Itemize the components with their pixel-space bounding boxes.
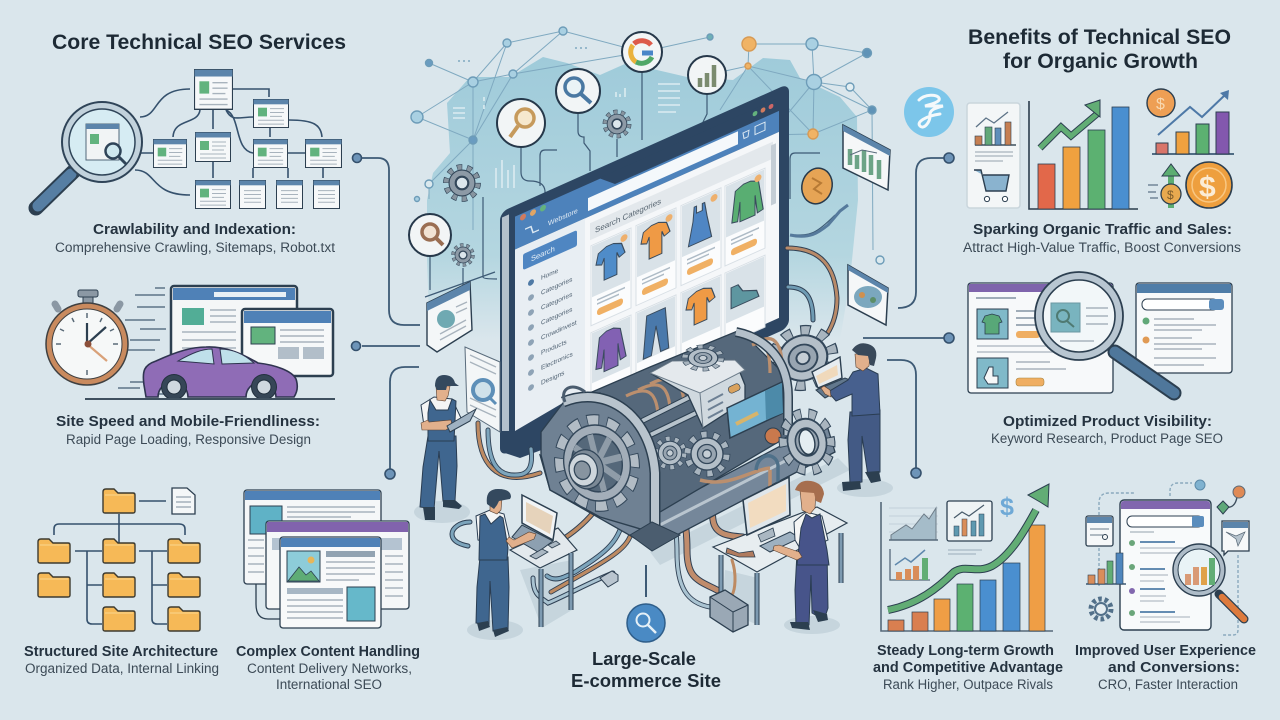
icon: search circle blue (556, 69, 600, 113)
front panel (541, 393, 655, 533)
text: improved user experience: and Conversions: (1108, 660, 1240, 676)
icon: gear (1091, 599, 1111, 619)
text: improved user experience (1075, 643, 1256, 692)
panel: complex content (236, 490, 420, 692)
chart: boxed mini (947, 501, 992, 541)
floor shadows (414, 458, 893, 640)
icon: small browser window (1086, 516, 1113, 546)
text: steady growth: and Competitive Advantage (873, 660, 1063, 676)
text: structured site architecture: Organized Data, Internal Linking (25, 661, 219, 676)
panel: product visibility (968, 272, 1232, 446)
machine interior (585, 330, 790, 515)
panel: long-term growth (873, 484, 1063, 692)
title: benefits: for Organic Growth (1003, 50, 1198, 73)
icon: search badge (627, 604, 665, 642)
text: complex content handling: International SEO (276, 677, 382, 692)
circuit lines to icons (425, 72, 835, 297)
interior pipes (626, 339, 782, 414)
title: benefits: Benefits of Technical SEO (968, 26, 1231, 49)
panel: organic traffic (963, 89, 1241, 255)
icon: layered content windows (244, 490, 409, 628)
text: crawlability and indexation: Crawlability and Indexation: (93, 222, 296, 238)
large monitor: Designs (541, 370, 565, 387)
icon: mini bars (1086, 553, 1126, 584)
icon: coin (798, 165, 836, 207)
machine base (540, 422, 835, 548)
large monitor: Crowdinvest (541, 319, 577, 342)
chart: line mini (890, 549, 930, 580)
large monitor: Categories (541, 306, 573, 327)
lower interior cables (700, 468, 770, 495)
icon: search results window (1136, 283, 1232, 373)
worker at left desk (476, 489, 577, 637)
left desk (510, 528, 577, 568)
icon: magnifying glass (36, 102, 142, 208)
text: complex content handling (236, 644, 420, 692)
icon: stopwatch (46, 290, 128, 385)
battery box (710, 590, 748, 632)
network of nodes (411, 27, 884, 264)
text: crawlability and indexation (55, 222, 335, 255)
title: core technical seo services: Core Technical SEO Services (52, 31, 346, 54)
cables (452, 248, 837, 607)
text: steady growth: Rank Higher, Outpace Rivals (883, 677, 1053, 692)
large monitor: Home (541, 267, 559, 282)
floating map window (848, 265, 888, 325)
panel: site architecture (24, 488, 219, 676)
text: improved user experience: Improved User Experience (1075, 643, 1256, 659)
dashed flow lines (1099, 483, 1238, 635)
label: large-scale e-commerce site: Large-Scale (592, 648, 696, 669)
text: optimized product visibility: Keyword Research, Product Page SEO (991, 431, 1223, 446)
plug on floor (600, 571, 618, 587)
large monitor: Categories (541, 276, 573, 297)
text: structured site architecture: Structured Site Architecture (24, 644, 218, 660)
icon: speed lines (118, 288, 166, 394)
chart: area mini (889, 508, 938, 540)
text: site speed and mobile-friendliness: Site Speed and Mobile-Friendliness: (56, 414, 320, 430)
bar chart: revenue with coin: $ (1156, 96, 1165, 113)
panel: user experience (1075, 480, 1256, 692)
icon: search circle orange (497, 99, 545, 147)
text: structured site architecture (24, 644, 219, 676)
icon: purple sports car (143, 347, 297, 400)
large monitor (500, 83, 789, 456)
icon: logo circle (904, 87, 954, 137)
background cloud shape (427, 57, 858, 340)
icon: flow nodes (1195, 480, 1245, 514)
top gear (685, 347, 721, 369)
panel: crawlability (36, 70, 341, 255)
floating chart window (843, 125, 890, 190)
pointer line (645, 565, 647, 597)
large monitor: Electronics (541, 351, 573, 372)
icon: coins with arrow: $ (1199, 171, 1216, 204)
floating window left upper (427, 282, 472, 352)
right desk with monitor (713, 477, 847, 625)
connectors: left (352, 154, 420, 479)
icon: google circle (622, 32, 662, 72)
icon: bars circle (688, 56, 726, 94)
text: complex content handling: Content Delivery Networks, (247, 661, 412, 676)
text: complex content handling: Complex Content Handling (236, 644, 420, 660)
icon: coins with arrow (1148, 162, 1232, 208)
large monitor: Products (541, 339, 567, 357)
worker at right with tablet (812, 343, 881, 491)
control panel screen (727, 382, 783, 438)
machine (540, 321, 842, 551)
icon: large magnifying glass (1035, 272, 1174, 393)
large monitor: Webstore (548, 206, 578, 228)
gear centre right (688, 434, 726, 474)
text: crawlability and indexation: Comprehensive Crawling, Sitemaps, Robot.txt (55, 240, 335, 255)
road line (85, 398, 335, 400)
icon: desktop browser window (171, 286, 297, 376)
text: steady growth (873, 643, 1063, 692)
icon: search circle small (409, 214, 451, 256)
right gear (778, 409, 836, 475)
large monitor: Categories (541, 291, 573, 312)
icon: plug (790, 205, 848, 236)
small data glyphs in cloud (453, 84, 680, 188)
handle loop (564, 387, 585, 402)
text: steady growth: Steady Long-term Growth (877, 643, 1054, 659)
icon: search results page (1120, 500, 1211, 630)
monitor bottom bezel (502, 390, 595, 458)
text: sparking organic traffic: Attract High-Value Traffic, Boost Conversions (963, 240, 1241, 255)
connectors: right (863, 153, 954, 478)
bar chart: rising traffic (1029, 100, 1138, 209)
right arch (736, 332, 788, 435)
text: improved user experience: CRO, Faster Interaction (1098, 677, 1238, 692)
icon: page tree (135, 70, 341, 209)
panel: site speed (46, 286, 335, 447)
icon: product card with cart (967, 103, 1020, 208)
label: large-scale e-commerce site (571, 648, 721, 691)
large monitor: Search (531, 244, 555, 263)
product row (596, 238, 625, 284)
housing arc (563, 397, 655, 533)
decorative text lines (948, 550, 982, 554)
icon: product page window (968, 283, 1113, 393)
title: benefits (968, 26, 1231, 73)
icon: dollar: $ (1000, 493, 1014, 521)
text: optimized product visibility (991, 414, 1223, 446)
icon: small chat window (1222, 521, 1249, 555)
icon: second browser window (242, 309, 333, 376)
worker at right desk (773, 481, 829, 630)
label: large-scale e-commerce site: E-commerce Site (571, 670, 721, 691)
base foot (630, 522, 680, 551)
text: sparking organic traffic (963, 222, 1241, 255)
silver housing block (650, 360, 745, 428)
gear centre left (656, 439, 684, 467)
orange detail (765, 428, 781, 444)
text: site speed and mobile-friendliness (56, 414, 320, 447)
icon: folder tree (38, 488, 200, 631)
left worker with clipboard (420, 375, 476, 520)
icon: magnifier with bars (1173, 544, 1244, 619)
text: site speed and mobile-friendliness: Rapid Page Loading, Responsive Design (66, 432, 311, 447)
floating window left lower (465, 347, 500, 432)
central illustration (409, 27, 893, 640)
bar chart: growth (881, 484, 1053, 631)
icon: gears floating (446, 112, 629, 265)
bar chart: revenue with coin (1147, 89, 1234, 154)
large monitor: Search Categories (595, 196, 661, 235)
text: optimized product visibility: Optimized Product Visibility: (1003, 414, 1212, 430)
large rear gear (764, 321, 842, 395)
text: sparking organic traffic: Sparking Organic Traffic and Sales: (973, 222, 1232, 238)
big gear (551, 412, 643, 514)
icon: coins with arrow: $ (1167, 188, 1174, 202)
